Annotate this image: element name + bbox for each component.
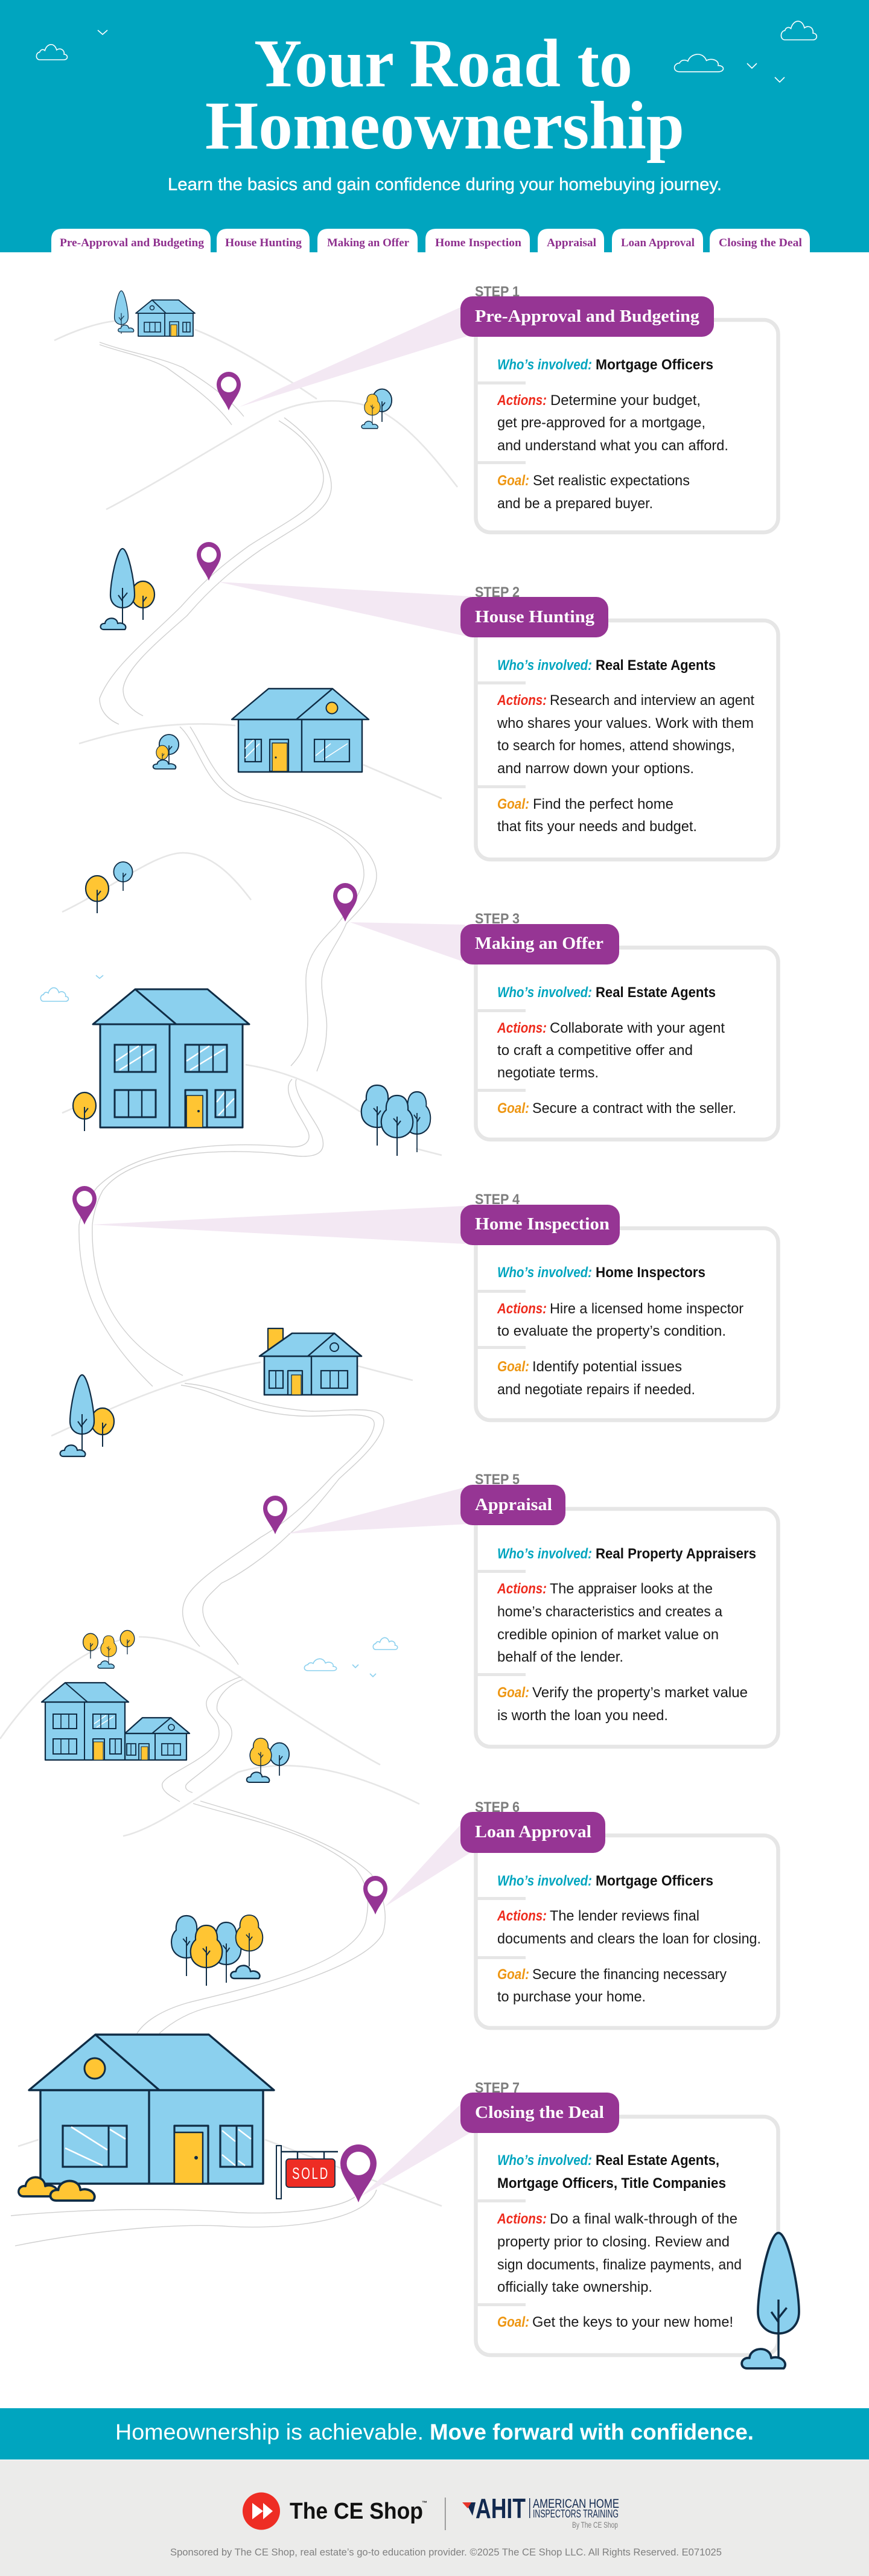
panel: step 6: Actions:	[497, 1908, 547, 1924]
map pin 4	[72, 1186, 97, 1225]
yellow shrubs	[19, 2177, 95, 2201]
navigation tabs: Appraisal	[547, 237, 596, 249]
tall tree and bush over step 7 card	[742, 2233, 799, 2368]
trees near pin 2	[101, 549, 154, 630]
two trees on hill	[86, 862, 133, 913]
panel: step 6: STEP 6	[475, 1799, 520, 1816]
panel: step 1: Determine your budget,	[550, 392, 701, 409]
three blue trees	[361, 1085, 430, 1156]
panel: step 7: Closing the Deal	[475, 2103, 604, 2122]
panel: step 2: Actions:	[497, 692, 547, 709]
title: Your Road to	[254, 26, 632, 101]
panel: step 1: Actions:	[497, 392, 547, 409]
logo: The CE Shop: ™	[422, 2500, 427, 2506]
panel: step 4: Actions:	[497, 1301, 547, 1317]
panel: step 7: Do a final walk-through of the	[550, 2211, 737, 2227]
panel: step 7: STEP 7	[475, 2080, 520, 2096]
panel: step 3	[460, 911, 778, 1140]
navigation tabs	[51, 229, 810, 252]
panel: step 2: Who’s involved:	[497, 657, 592, 674]
panel: step 1	[460, 284, 778, 532]
panel: step 2: that fits your needs and budget.	[497, 818, 697, 835]
panel: step 2	[460, 584, 778, 859]
panel: step 6: Secure the financing necessary	[532, 1966, 727, 1983]
logo: AHIT: By The CE Shop	[572, 2520, 618, 2530]
house 3	[93, 989, 249, 1127]
winding road	[11, 342, 385, 2246]
panel: step 4: Home Inspectors	[596, 1264, 705, 1281]
logo: AHIT	[462, 2493, 619, 2530]
small yellow trees on hill	[83, 1630, 135, 1668]
panel: step 1: Set realistic expectations	[533, 473, 690, 489]
panel: step 3: Secure a contract with the seller.	[532, 1100, 736, 1117]
logo: The CE Shop: The CE Shop	[290, 2499, 423, 2524]
panel: step 1: Goal:	[497, 473, 529, 489]
panel: step 2: STEP 2	[475, 584, 520, 601]
panel: step 7: officially take ownership.	[497, 2279, 652, 2295]
panel: step 7	[460, 2080, 778, 2355]
closing banner: Homeownership is achievable.	[115, 2420, 424, 2444]
panel: step 2: Real Estate Agents	[596, 657, 716, 674]
panel: step 4: Identify potential issues	[532, 1359, 682, 1375]
panel: step 7: Mortgage Officers, Title Companies	[497, 2175, 726, 2192]
panel: step 1: Mortgage Officers	[596, 357, 713, 373]
panel: step 6: Loan Approval	[475, 1822, 591, 1841]
panel: step 2: to search for homes, attend showings,	[497, 738, 735, 754]
panel: step 4: to evaluate the property’s condition.	[497, 1323, 726, 1339]
panel: step 3: STEP 3	[475, 911, 520, 927]
panel: step 2: Find the perfect home	[533, 796, 673, 812]
panel: step 7: sign documents, finalize payments, and	[497, 2257, 742, 2273]
panel: step 7: Real Estate Agents,	[596, 2152, 719, 2169]
navigation tabs: Home Inspection	[435, 237, 521, 249]
panel: step 3: Real Estate Agents	[596, 984, 716, 1001]
closing banner	[0, 2408, 869, 2460]
panel: step 5: Who’s involved:	[497, 1546, 592, 1562]
panel: step 1: Who’s involved:	[497, 357, 592, 373]
panel: step 6: Who’s involved:	[497, 1873, 592, 1889]
logo: AHIT: AHIT	[476, 2493, 526, 2524]
panel: step 3: Actions:	[497, 1020, 547, 1036]
panel: step 4: Goal:	[497, 1359, 529, 1375]
panel: step 2: and narrow down your options.	[497, 760, 694, 777]
panel: step 2: who shares your values. Work with them	[497, 715, 754, 732]
title	[205, 26, 684, 164]
trees near house 4	[60, 1375, 114, 1456]
panel: step 5: home’s characteristics and creates a	[497, 1604, 723, 1620]
panel: step 5: Goal:	[497, 1685, 529, 1701]
panel: step 4: STEP 4	[475, 1191, 520, 1208]
panel: step 6: Mortgage Officers	[596, 1873, 713, 1889]
panel: step 7: property prior to closing. Review and	[497, 2234, 730, 2250]
panel: step 7: Goal:	[497, 2314, 529, 2330]
panel: step 4: Hire a licensed home inspector	[550, 1301, 743, 1317]
panel: step 6: to purchase your home.	[497, 1989, 646, 2005]
panel: step 2: House Hunting	[475, 607, 595, 626]
panel: step 5: is worth the loan you need.	[497, 1707, 668, 1724]
logo: The CE Shop	[243, 2493, 427, 2530]
trees near pin 1	[361, 389, 392, 429]
house 2	[232, 689, 369, 772]
grove of four trees	[171, 1915, 263, 1986]
sold sign: SOLD	[292, 2164, 329, 2182]
header clouds and birds	[36, 21, 816, 82]
panel: step 4: Home Inspection	[475, 1214, 610, 1234]
map pin 6	[363, 1876, 387, 1914]
panel: step 5: behalf of the lender.	[497, 1649, 623, 1665]
house 5 pair	[42, 1683, 189, 1760]
panel: step 6	[460, 1799, 778, 2028]
map pin 7	[340, 2144, 377, 2202]
callout beams from map pins to step badges	[91, 305, 471, 2197]
panel: step 6: Goal:	[497, 1966, 529, 1983]
panel: step 5: Verify the property’s market value	[532, 1685, 748, 1701]
sky clouds and birds	[40, 975, 398, 1677]
panel: step 5: Real Property Appraisers	[596, 1546, 756, 1562]
panel: step 2: Research and interview an agent	[550, 692, 754, 709]
panel: step 5: Appraisal	[475, 1495, 552, 1514]
house 1 with tree	[115, 291, 195, 336]
panel: step 6: The lender reviews final	[550, 1908, 699, 1924]
panel: step 5: STEP 5	[475, 1471, 520, 1488]
panel: step 1: and be a prepared buyer.	[497, 496, 653, 512]
panel: step 5: The appraiser looks at the	[550, 1581, 713, 1597]
hills	[0, 320, 457, 2206]
panel: step 6: documents and clears the loan for closing.	[497, 1931, 761, 1947]
trees by house 2	[153, 735, 179, 769]
panel: step 3: Collaborate with your agent	[550, 1020, 725, 1036]
panel: step 4	[460, 1191, 778, 1420]
panel: step 3: Making an Offer	[475, 934, 603, 953]
navigation tabs: Making an Offer	[327, 237, 410, 249]
panel: step 4: Who’s involved:	[497, 1264, 592, 1281]
logo: AHIT: AMERICAN HOME	[533, 2497, 619, 2511]
sponsor line: Sponsored by The CE Shop, real estate’s go-to education provider. ©2025 The CE Shop LLC. All Rights Reserved. E071025	[170, 2546, 722, 2558]
panel: step 7: Get the keys to your new home!	[532, 2314, 733, 2330]
title: Homeownership	[205, 88, 684, 164]
map pin 3	[333, 883, 357, 922]
house 4	[259, 1328, 361, 1395]
yellow tree by house 3	[73, 1092, 96, 1131]
subtitle: Learn the basics and gain confidence during your homebuying journey.	[168, 175, 722, 194]
panel: step 1: Pre-Approval and Budgeting	[475, 307, 700, 326]
panel: step 3: Who’s involved:	[497, 984, 592, 1001]
panel: step 1: STEP 1	[475, 284, 520, 300]
header banner	[0, 0, 869, 252]
navigation tabs: Closing the Deal	[719, 237, 802, 249]
navigation tabs: Pre-Approval and Budgeting	[60, 237, 205, 249]
panel: step 5: Actions:	[497, 1581, 547, 1597]
panel: step 3: Goal:	[497, 1100, 529, 1117]
panel: step 3: negotiate terms.	[497, 1065, 599, 1081]
logo: AHIT: INSPECTORS TRAINING	[533, 2508, 619, 2520]
final house	[29, 2035, 274, 2184]
trees near road bend	[247, 1738, 289, 1782]
panel: step 1: and understand what you can afford.	[497, 438, 728, 454]
footer	[0, 2460, 869, 2576]
panel: step 2: Goal:	[497, 796, 529, 812]
panel: step 5: credible opinion of market value on	[497, 1627, 719, 1643]
sold sign	[276, 2146, 338, 2199]
navigation tabs: Loan Approval	[621, 237, 695, 249]
map pin 5	[263, 1496, 287, 1534]
map pin 2	[197, 542, 221, 581]
panel: step 5	[460, 1471, 778, 1747]
panel: step 7: Who’s involved:	[497, 2152, 592, 2169]
panel: step 1: get pre-approved for a mortgage,	[497, 415, 705, 431]
panel: step 3: to craft a competitive offer and	[497, 1042, 693, 1059]
navigation tabs: House Hunting	[225, 237, 302, 249]
closing banner: Move forward with confidence.	[430, 2420, 754, 2444]
panel: step 4: and negotiate repairs if needed.	[497, 1382, 695, 1398]
map pin 1	[217, 372, 241, 410]
panel: step 7: Actions:	[497, 2211, 547, 2227]
